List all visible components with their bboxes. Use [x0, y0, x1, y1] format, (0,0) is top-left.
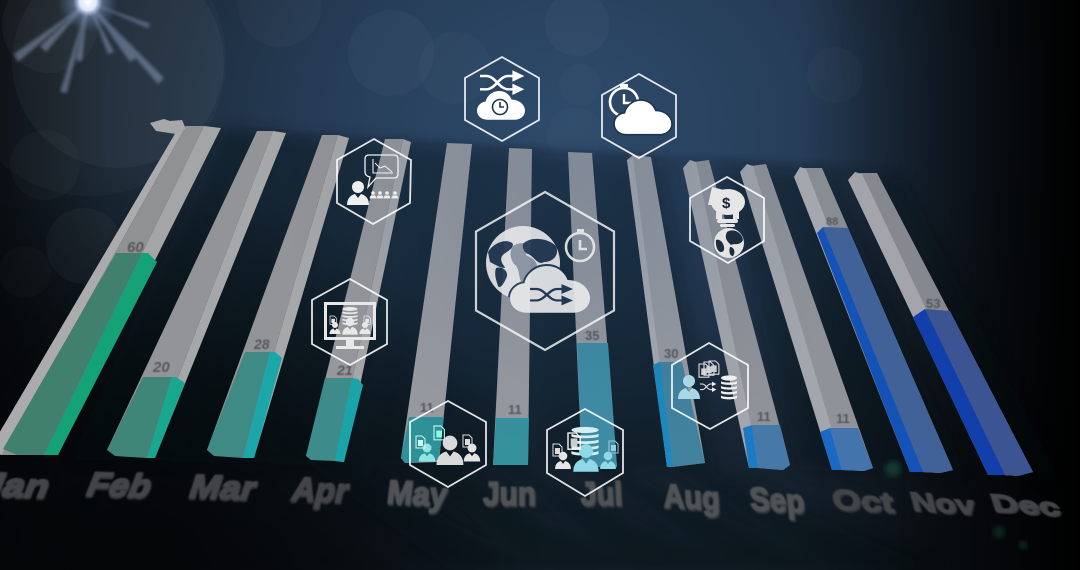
bar value labels: 11 [757, 409, 771, 424]
bokeh circles [0, 0, 863, 298]
month labels: Apr [288, 471, 353, 510]
bar value labels: 11 [836, 411, 850, 426]
bar: Dec 53 [848, 172, 1033, 476]
shadows cast by bars [70, 128, 1060, 570]
month labels: Dec [987, 490, 1064, 521]
bar value labels: 21 [336, 362, 353, 378]
month labels: Feb [81, 466, 159, 505]
bar value labels: 88 [826, 216, 838, 228]
month labels: Oct [829, 484, 896, 518]
bar: Aug 30 [627, 155, 705, 467]
bar: Oct 11 [740, 164, 873, 471]
bar value labels [127, 216, 940, 426]
bar value labels: 30 [664, 346, 678, 361]
bar value labels: 11 [420, 400, 434, 415]
month labels: Nov [907, 488, 978, 520]
icon: presenter analytics hexagon [337, 139, 411, 224]
bar: Jan 60 [0, 119, 221, 455]
green lens spots [885, 461, 1027, 549]
bar value labels: 60 [127, 239, 144, 256]
month labels: Sep [748, 481, 806, 521]
bar: Sep 11 [683, 160, 790, 470]
bar: Jul 35 [568, 152, 617, 467]
month labels: Mar [184, 469, 261, 507]
icon: large globe, cloud and timer hexagon [476, 192, 614, 350]
month labels: May [385, 474, 450, 514]
bar value labels: 20 [152, 359, 170, 376]
icon: team database hexagon [547, 409, 623, 496]
bar: Mar 28 [207, 135, 349, 458]
lens flare [14, 0, 164, 93]
bar: May 11 [401, 143, 472, 463]
bar value labels: 53 [926, 296, 940, 311]
bar value labels: 35 [585, 328, 599, 343]
month labels [0, 466, 1064, 521]
icon: shuffle and cloud timer hexagon [465, 57, 539, 141]
icon: team documents hexagon [410, 401, 486, 487]
bar: Nov 88 [794, 167, 953, 473]
icon: timer and cloud hexagon [602, 74, 676, 158]
bar chart: 12 monthly 3D bars [0, 119, 1033, 476]
bar: Feb 20 [107, 131, 286, 458]
icon: piggy bank and globe hexagon: $ [722, 195, 731, 212]
icon: user to database hexagon [672, 343, 748, 429]
bar: Apr 21 [306, 139, 411, 462]
bar value labels: 28 [253, 336, 270, 352]
icon: monitor database hexagon [312, 279, 387, 365]
month labels: Jun [483, 475, 536, 512]
bar: Jun 11 [493, 148, 532, 465]
month labels: Aug [662, 478, 721, 518]
bar value labels: 11 [508, 402, 522, 417]
month labels: Jul [579, 475, 623, 512]
icon: piggy bank and globe hexagon [690, 177, 764, 263]
